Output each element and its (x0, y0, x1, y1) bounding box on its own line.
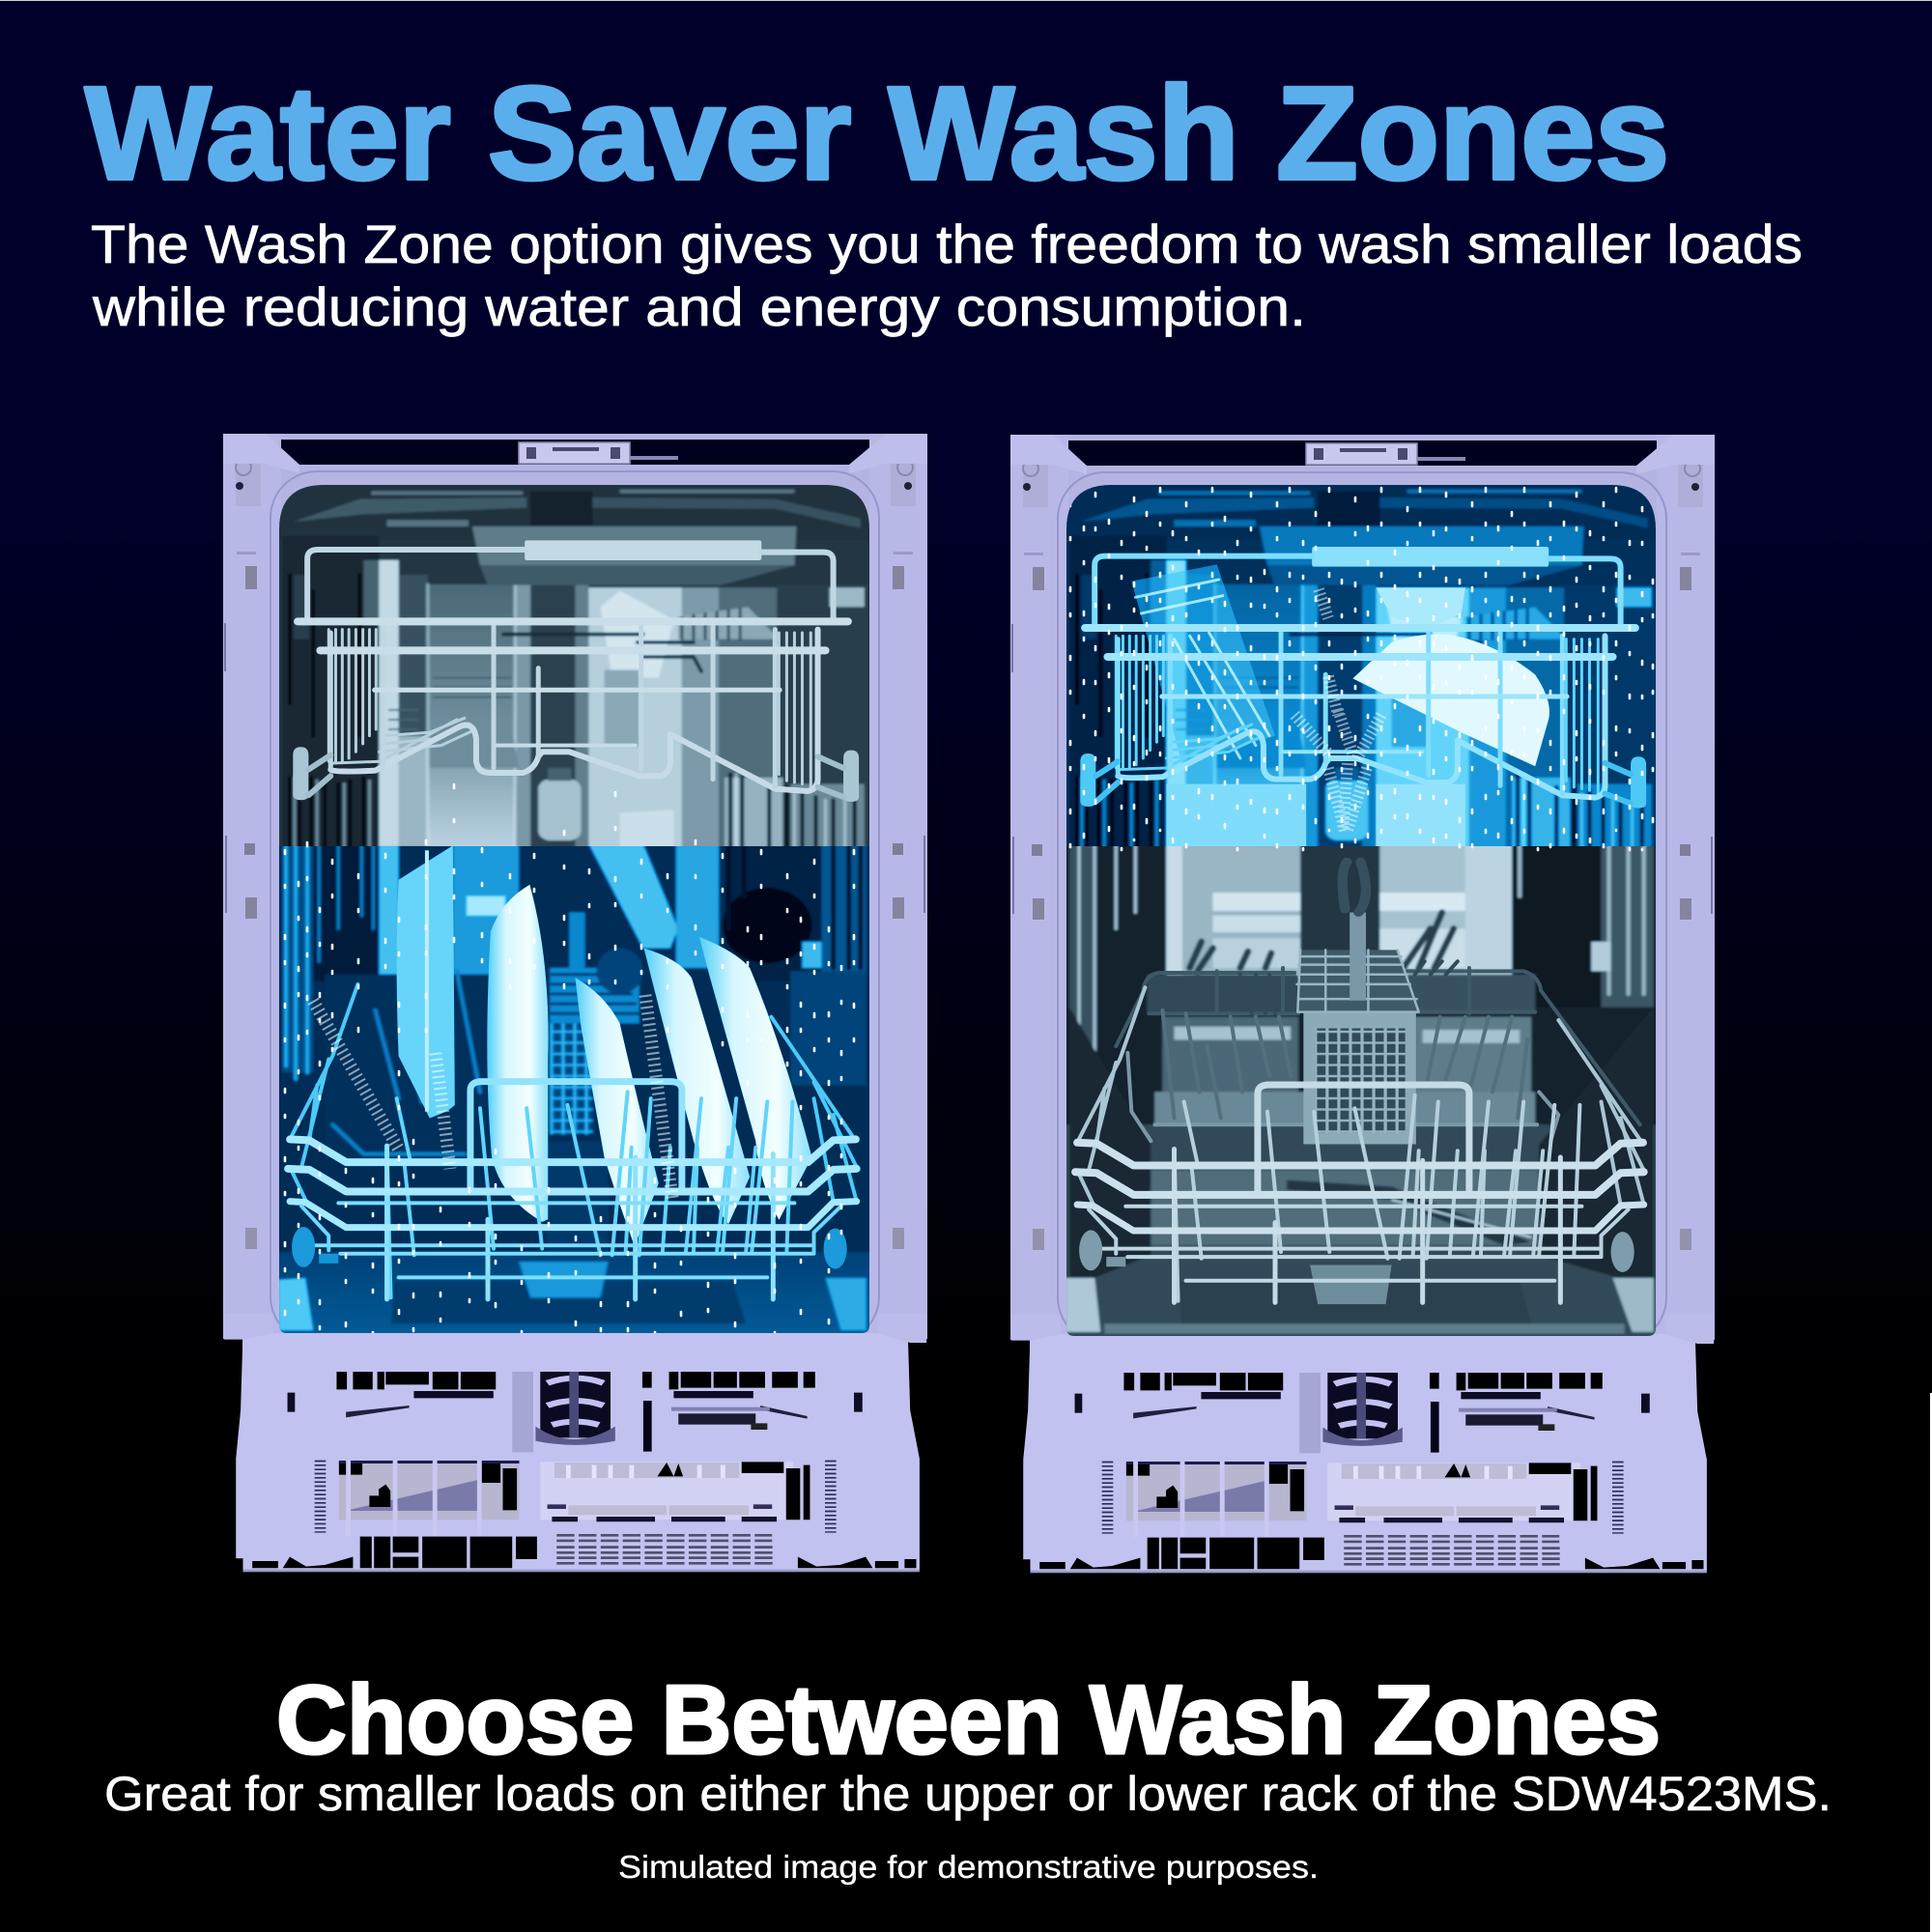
right dishwasher interior (1058, 478, 1666, 1343)
plate 2 (575, 978, 659, 1246)
back rack wires (1116, 968, 1640, 1124)
back plates (397, 845, 455, 1118)
right spray streams (1294, 589, 1381, 831)
intro text: while reducing water and energy consumption. (92, 276, 1306, 337)
plate 4 (699, 937, 812, 1220)
intro text (91, 213, 1803, 337)
floor drain (1310, 1265, 1392, 1304)
right upper zone, active blue (1058, 478, 1666, 858)
upturned bowl (1352, 634, 1549, 766)
left spray streams (313, 995, 672, 1198)
left dishwasher interior (270, 478, 879, 1344)
left lower zone, active blue (270, 831, 879, 1344)
plate 3 (644, 949, 750, 1224)
top edge line (0, 0, 1932, 1)
cutlery basket (1297, 862, 1419, 1144)
plate 1 (487, 885, 549, 1222)
right lower zone, inactive (1058, 831, 1666, 1343)
right dishwasher frame and base (1010, 435, 1715, 1573)
title: Water Saver Wash Zones (85, 60, 1669, 208)
dishwasher: upper rack wash zone active (1010, 435, 1715, 1573)
disclaimer: Simulated image for demonstrative purposes. (618, 1849, 1319, 1885)
glass jar (1131, 564, 1275, 763)
dishwasher: lower rack wash zone active (223, 434, 927, 1572)
right water droplets (1070, 488, 1653, 850)
intro text: The Wash Zone option gives you the freedom to wash smaller loads (91, 213, 1803, 274)
right edge line (1930, 1393, 1932, 1932)
section heading: Choose Between Wash Zones (276, 1666, 1661, 1775)
left upper zone, inactive (270, 478, 879, 858)
left dishwasher frame and base (223, 434, 927, 1572)
left water droplets (285, 784, 854, 1343)
section subheading: Great for smaller loads on either the upper or lower rack of the SDW4523MS. (104, 1767, 1832, 1821)
